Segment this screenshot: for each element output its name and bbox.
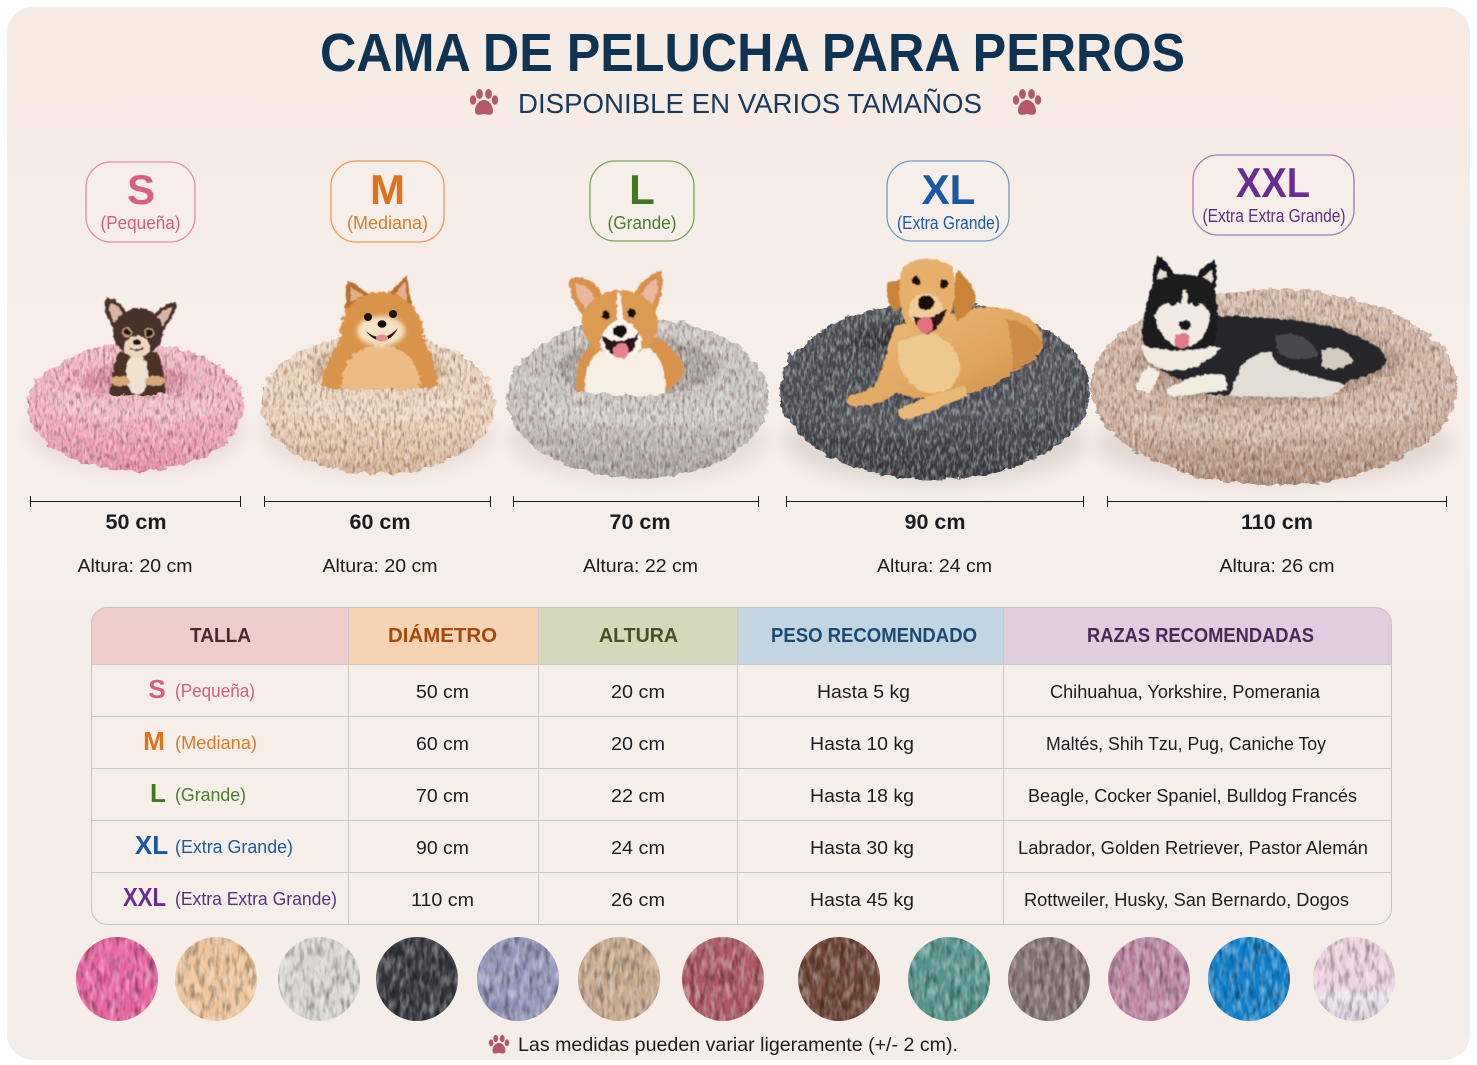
subtitle text: DISPONIBLE EN VARIOS TAMAÑOS xyxy=(518,88,982,119)
size badge XL: (Extra Grande) xyxy=(897,213,1000,233)
row XL: 24 cm xyxy=(611,837,665,858)
row M: 20 cm xyxy=(611,733,665,754)
dog: husky xyxy=(1136,255,1386,398)
table header: DIÁMETRO xyxy=(388,624,497,647)
row L xyxy=(150,778,1357,808)
row M: M xyxy=(143,726,165,756)
size badge S: (Pequeña) xyxy=(100,213,180,233)
dog: pomeranian xyxy=(321,275,437,394)
size badge L xyxy=(590,161,694,241)
size badge XXL: (Extra Extra Grande) xyxy=(1202,206,1346,226)
dimension L: 70 cm xyxy=(610,511,670,534)
dimension XXL: Altura: 26 cm xyxy=(1220,556,1334,576)
footnote text: Las medidas pueden variar ligeramente (+/- 2 cm). xyxy=(518,1034,958,1056)
size badge S xyxy=(86,162,195,242)
size badge XL xyxy=(887,161,1009,241)
icon: footnote paw xyxy=(489,1035,509,1054)
icon: right paw xyxy=(1013,89,1041,115)
bed XXL front rim xyxy=(1091,345,1457,485)
bed L front rim xyxy=(507,365,769,478)
bed M with pomeranian xyxy=(261,275,495,474)
dimension S: 50 cm xyxy=(106,511,166,534)
row XL: Labrador, Golden Retriever, Pastor Alemán xyxy=(1018,837,1368,858)
row S xyxy=(148,674,1321,704)
row XXL: (Extra Extra Grande) xyxy=(175,889,337,909)
bed M front rim xyxy=(261,375,495,474)
icon: left paw xyxy=(470,89,498,115)
table header: RAZAS RECOMENDADAS xyxy=(1087,625,1314,647)
size badge M xyxy=(331,161,444,242)
bed XL front rim xyxy=(780,335,1090,480)
row L: Hasta 18 kg xyxy=(810,785,914,806)
row XL: 90 cm xyxy=(416,837,469,858)
row L: (Grande) xyxy=(175,785,246,805)
row L: 70 cm xyxy=(416,785,469,806)
dimension S xyxy=(30,496,240,576)
bed L with corgi xyxy=(507,271,769,480)
row M: Hasta 10 kg xyxy=(810,733,914,754)
row XL xyxy=(135,830,1368,860)
size badge M: M xyxy=(370,166,405,213)
row XXL: Rottweiler, Husky, San Bernardo, Dogos xyxy=(1024,889,1349,910)
row S: (Pequeña) xyxy=(175,681,255,701)
row M: Maltés, Shih Tzu, Pug, Caniche Toy xyxy=(1046,733,1327,754)
row XXL xyxy=(123,882,1349,912)
row L: Beagle, Cocker Spaniel, Bulldog Francés xyxy=(1028,785,1357,806)
size badge XL: XL xyxy=(922,166,975,213)
dimension XXL: 110 cm xyxy=(1241,511,1313,534)
dimension XXL xyxy=(1107,496,1446,576)
row S: S xyxy=(148,674,166,704)
row S: Hasta 5 kg xyxy=(817,681,910,702)
size badge M: (Mediana) xyxy=(347,213,428,233)
table header: ALTURA xyxy=(599,625,678,647)
footnote xyxy=(489,1034,958,1056)
row XXL: XXL xyxy=(123,882,166,912)
size badge XXL xyxy=(1193,155,1354,235)
dimension M xyxy=(264,496,490,576)
colour swatches xyxy=(76,937,1395,1021)
table header: PESO RECOMENDADO xyxy=(771,625,977,647)
row M: 60 cm xyxy=(416,733,469,754)
bed XXL with husky xyxy=(1091,255,1457,485)
row XL: Hasta 30 kg xyxy=(810,837,914,858)
table header xyxy=(92,608,1392,664)
dimension L: Altura: 22 cm xyxy=(583,556,698,576)
row S: 20 cm xyxy=(611,681,665,702)
dimension L xyxy=(513,496,758,576)
dog: golden retriever body xyxy=(875,259,1043,399)
dog: golden retriever front legs xyxy=(846,372,968,419)
size table xyxy=(92,608,1392,924)
row XL: XL xyxy=(135,830,168,860)
row S: Chihuahua, Yorkshire, Pomerania xyxy=(1050,681,1321,702)
row XXL: 26 cm xyxy=(611,889,665,910)
dimension S: Altura: 20 cm xyxy=(78,556,192,576)
size badge L: L xyxy=(629,166,655,213)
row L: 22 cm xyxy=(611,785,665,806)
bed XL with golden retriever xyxy=(780,259,1090,484)
row S: 50 cm xyxy=(416,681,469,702)
dimension XL: Altura: 24 cm xyxy=(877,556,992,576)
subtitle with paws xyxy=(470,88,1041,119)
dog: corgi xyxy=(570,271,684,400)
row M xyxy=(143,726,1327,756)
title: CAMA DE PELUCHA PARA PERROS xyxy=(320,23,1185,83)
size badge XXL: XXL xyxy=(1236,159,1310,206)
row XXL: 110 cm xyxy=(411,889,474,910)
size badge L: (Grande) xyxy=(608,213,676,233)
dog: chihuahua xyxy=(105,297,176,396)
dimension M: Altura: 20 cm xyxy=(322,556,438,576)
row L: L xyxy=(150,778,166,808)
dimension XL: 90 cm xyxy=(904,511,966,534)
row M: (Mediana) xyxy=(175,733,257,753)
row XL: (Extra Grande) xyxy=(175,837,293,857)
dimension XL xyxy=(786,496,1084,576)
row XXL: Hasta 45 kg xyxy=(810,889,914,910)
bed S front rim xyxy=(28,378,244,471)
table header: TALLA xyxy=(190,625,251,647)
bed S with chihuahua xyxy=(28,297,244,471)
size badge S: S xyxy=(127,166,155,213)
dimension M: 60 cm xyxy=(350,511,410,534)
